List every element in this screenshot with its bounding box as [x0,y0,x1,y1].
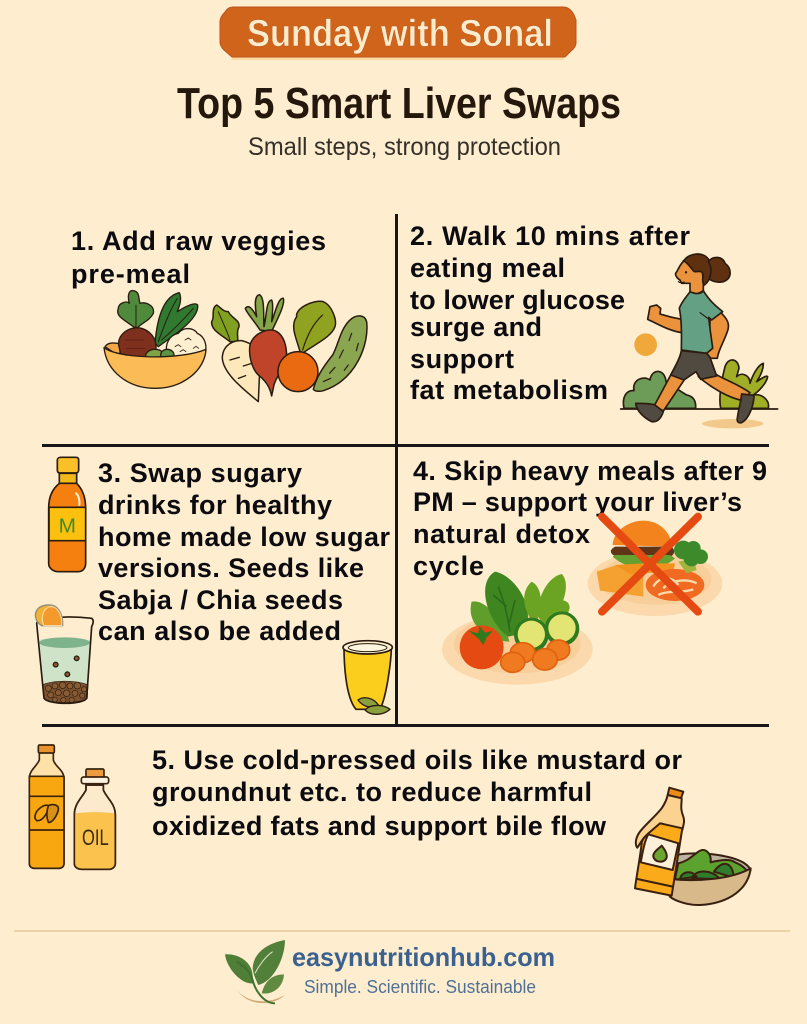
text: swap 2: fat metabolism [410,375,608,405]
subtitle: Small steps, strong protection [248,133,561,161]
text: swap 3: drinks for healthy [98,490,332,520]
icon: woman walking [621,254,778,428]
text: swap 3: can also be added [98,616,341,646]
text: swap 4: cycle [413,551,484,581]
icon: bowl of raw vegetables [104,291,206,388]
text: swap 1: pre-meal [71,259,190,289]
icon: mango drink bottle: M [59,515,76,538]
icon: glass with chia seeds and orange [35,605,93,703]
text: swap 4: PM – support your liver’s [413,487,742,517]
icon: mustard oil bottles: OIL [82,825,109,850]
text: swap 1 [71,226,326,289]
text: swap 5: 5. Use cold-pressed oils like mustard or [152,745,682,775]
icon: healthy salad plate [442,572,593,685]
text: swap 5 [152,745,682,841]
text: swap 1: 1. Add raw veggies [71,226,326,256]
text: swap 2: support [410,344,514,374]
text: swap 3: home made low sugar [98,522,390,552]
text: swap 3: versions. Seeds like [98,553,364,583]
text: swap 3: Sabja / Chia seeds [98,585,343,615]
brand name: easynutritionhub.com [292,942,555,972]
text: swap 2 [410,221,690,405]
tagline: Simple. Scientific. Sustainable [304,977,536,997]
icon: mustard oil bottles [29,745,115,869]
text: swap 2: eating meal [410,253,565,283]
text: swap 2: to lower glucose [410,285,625,315]
grid lines [42,214,769,727]
text: swap 2: surge and [410,312,542,342]
text: swap 4 [413,456,767,581]
logo: plant leaves [225,940,285,1003]
footer divider [14,930,790,932]
text: swap 3 [98,458,390,646]
text: swap 3: 3. Swap sugary [98,458,302,488]
text: swap 5: oxidized fats and support bile flow [152,811,607,841]
text: swap 5: groundnut etc. to reduce harmful [152,777,592,807]
icon: heavy meal crossed out [588,517,722,616]
icon: yellow seed drink [343,641,392,714]
icon: mango drink bottle [49,457,86,572]
title: Top 5 Smart Liver Swaps [177,79,621,128]
icon: root vegetables and cucumber [212,295,367,402]
banner: Sunday with Sonal: Sunday with Sonal [247,13,553,55]
text: swap 4: natural detox [413,519,590,549]
text: swap 4: 4. Skip heavy meals after 9 [413,456,767,486]
icon: oil bottle and salad bowl [635,788,751,905]
text: swap 2: 2. Walk 10 mins after [410,221,690,251]
